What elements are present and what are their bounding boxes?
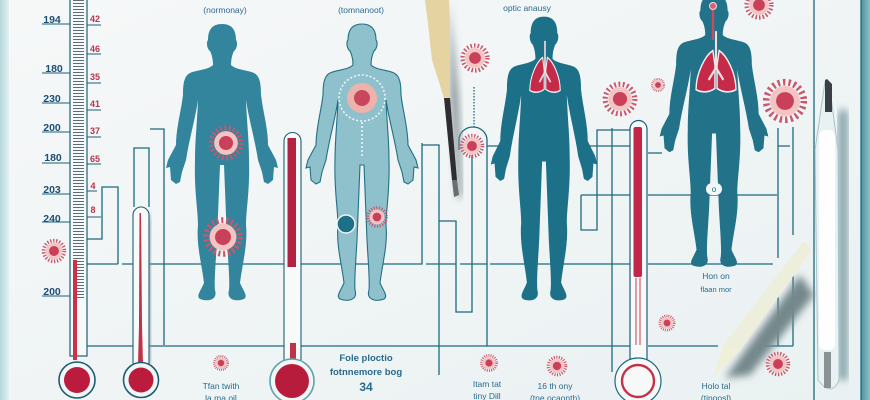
bulb [270, 359, 314, 400]
caption 6: Holo tal [702, 381, 730, 391]
stem [636, 278, 640, 345]
pen cap [825, 79, 832, 112]
caption 2 center: 34 [359, 380, 373, 394]
brush tip [452, 180, 459, 197]
thermometer 1 right scale: 41 [90, 99, 100, 109]
thermometer 1 left scale [43, 14, 63, 298]
glass body [815, 82, 839, 389]
figure 1: abdomen and knee infection [166, 24, 278, 300]
caption 5: Hon on [702, 271, 730, 281]
virus: left [44, 241, 64, 261]
thermometer 1 left ticks [42, 24, 70, 296]
body silhouette 3 [491, 17, 597, 300]
caption 1: Tfan twith [203, 381, 239, 391]
thermometer 4 [615, 120, 661, 400]
virus 1 [463, 46, 487, 70]
thermometer 1 right scale: 8 [90, 205, 96, 215]
pen inner white [819, 130, 835, 350]
left edge band [0, 0, 9, 400]
mercury [73, 260, 77, 360]
thermometer 1 left scale: 200 [43, 286, 61, 298]
body silhouette 2 [306, 24, 418, 300]
thermometer 1 left scale: 240 [43, 213, 61, 225]
virus: abdomen [211, 128, 241, 158]
virus 4 [652, 79, 664, 91]
marker label: o [712, 185, 717, 194]
thermometer 1 left scale: 230 [43, 93, 61, 105]
label figure 1: (normonay) [203, 5, 247, 15]
virus 11 [768, 354, 788, 374]
virus: knee [368, 208, 386, 226]
virus 2 [462, 136, 482, 156]
brush tool [425, 0, 462, 200]
thermometer 1 right scale: 35 [90, 72, 100, 82]
right edge band [861, 0, 870, 400]
caption 2 center: fotnnemore bog [330, 367, 402, 378]
bulb [124, 362, 158, 398]
thermometer 1 right scale: 65 [90, 154, 100, 164]
thermometer 1 left scale: 180 [44, 152, 62, 164]
figure 3: lungs [491, 17, 597, 300]
body silhouette 4 [660, 0, 768, 267]
brush shadow [449, 0, 462, 200]
viruses [214, 0, 804, 375]
virus 6 [766, 82, 804, 120]
body silhouette 1 [166, 24, 278, 300]
virus 8 [481, 355, 497, 371]
glass pen [815, 79, 848, 389]
mercury [634, 127, 642, 277]
caption 2 center: Fole ploctio [339, 353, 393, 364]
pen tip [824, 352, 831, 388]
virus 10 [660, 316, 674, 330]
lungs [696, 31, 736, 92]
bulb fill [64, 367, 90, 393]
top labels [203, 3, 552, 15]
virus 9 [548, 357, 566, 375]
chalk pen [713, 242, 814, 378]
mercury [288, 138, 296, 267]
thermometer 1 right scale: 4 [90, 181, 96, 191]
bulb [59, 362, 95, 398]
thermometer 1 left scale: 180 [45, 63, 63, 75]
bulb fill [128, 368, 154, 392]
thermometer 1 left scale: 200 [43, 122, 61, 134]
airway [712, 10, 714, 40]
virus 5 [747, 0, 771, 17]
bulb fill [275, 364, 309, 398]
thermometer 2 [124, 207, 158, 398]
lungs [530, 41, 560, 92]
ring inner [622, 365, 654, 397]
chest inflammation [339, 75, 385, 158]
thermometer 1 right scale: 42 [90, 14, 100, 24]
thermometer 1 right ticks [87, 25, 101, 217]
thermometer 1 right scale: 46 [90, 44, 100, 54]
chalk shadow [725, 275, 814, 378]
bottom captions [203, 271, 732, 400]
ring bulb [615, 358, 661, 400]
tube [284, 132, 301, 362]
caption 4: 16 th ony [538, 381, 572, 391]
graduations [73, 0, 84, 300]
label figure 3: optic anausy [503, 3, 552, 13]
tube [630, 120, 647, 362]
chalk tip [713, 344, 739, 377]
thermometer 1 left scale: 194 [43, 14, 61, 26]
caption 5: flaan mor [700, 285, 732, 294]
knee joint [337, 215, 355, 233]
brush neck [444, 98, 457, 180]
virus 7 [214, 356, 228, 370]
virus 3 [605, 84, 635, 114]
shadow [146, 215, 151, 365]
thermometer 1 right scale [90, 14, 100, 215]
knee marker [706, 183, 722, 195]
glass shadow [838, 110, 848, 380]
figure 4: lungs and airway [660, 0, 768, 267]
tube [70, 0, 87, 356]
virus: knee [206, 220, 240, 254]
thermometer 1 left scale: 203 [43, 184, 61, 196]
figure 2: chest and knee inflammation [306, 24, 418, 300]
mercury [138, 213, 143, 365]
lower mercury [290, 343, 296, 365]
thermometer 3 [270, 132, 314, 400]
caption 3: Itam tat [473, 379, 501, 389]
thermometer 1 right scale: 37 [90, 126, 100, 136]
thermometer 1: scale [59, 0, 95, 398]
tube [133, 207, 149, 365]
label figure 2: (tomnanoot) [338, 5, 384, 15]
airway marker [710, 2, 716, 10]
brush handle [425, 0, 450, 98]
chalk body [724, 242, 811, 352]
